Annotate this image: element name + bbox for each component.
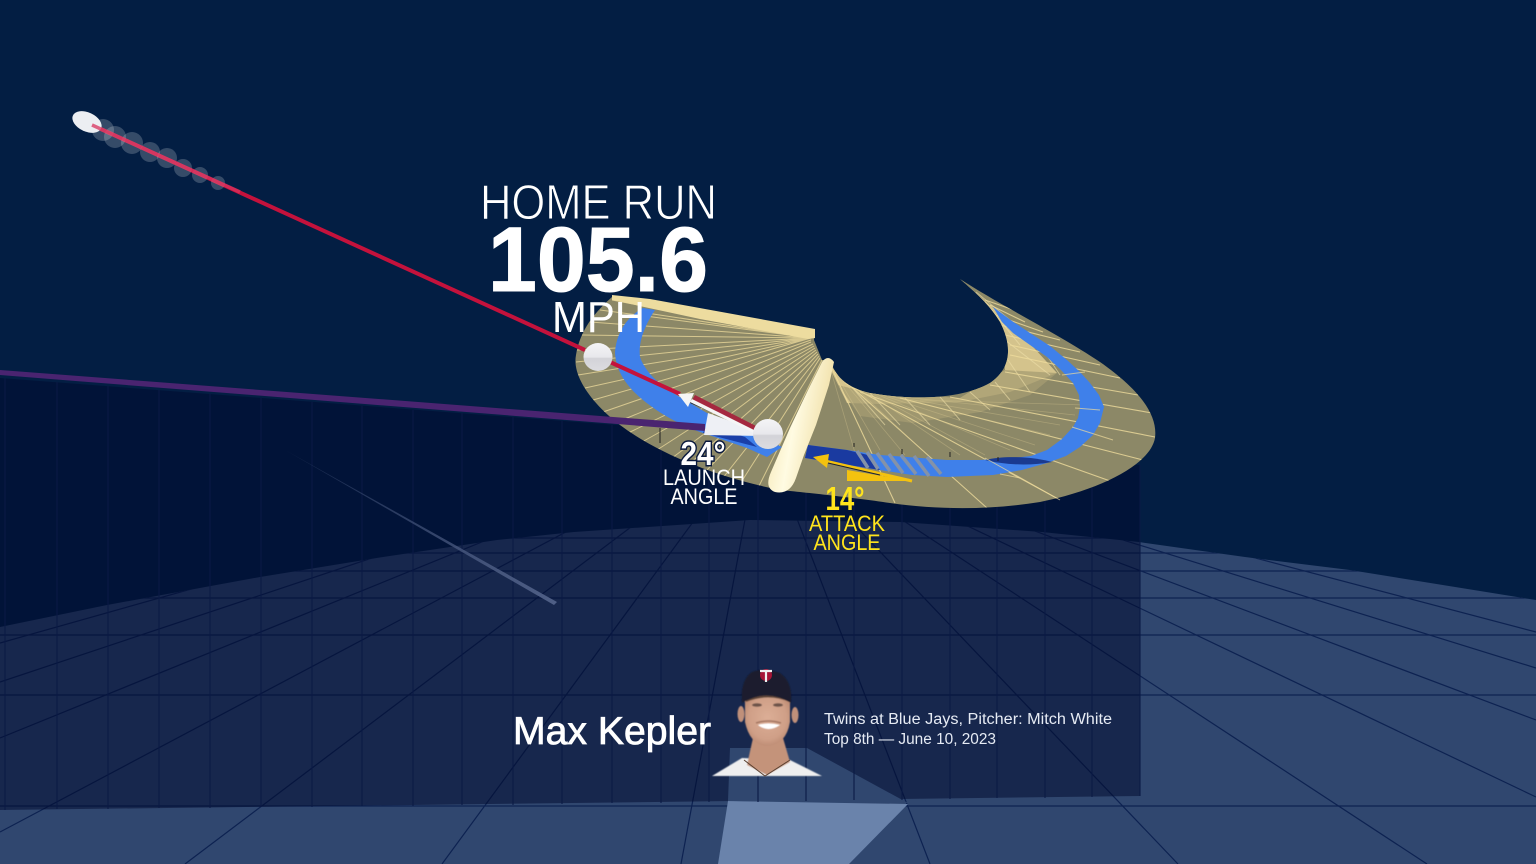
band shadow (985, 457, 1052, 464)
launch angle label: 24° (680, 435, 726, 472)
batted ball exit line: red (92, 125, 680, 394)
right lobe guide lines (829, 300, 1155, 508)
ball in flight (584, 343, 612, 371)
exit velocity unit: MPH (552, 293, 645, 342)
swing surface inner dense band (576, 279, 1155, 508)
bat (768, 358, 834, 492)
exit velocity value: 105.6 (488, 209, 708, 311)
player headshot (712, 669, 822, 776)
attack angle label: ANGLE (814, 530, 880, 555)
ball trail (69, 107, 240, 192)
rear bat position (612, 295, 815, 339)
backdrop wall panel (0, 378, 1140, 810)
launch angle label (663, 435, 745, 509)
attack angle label: 14° (826, 480, 864, 517)
sensor ticks (660, 428, 998, 461)
left lobe guide lines (576, 300, 822, 488)
game details: Twins at Blue Jays, Pitcher: Mitch White (824, 711, 1112, 728)
dark blue band near bat (805, 445, 880, 470)
guide line overlays on band (985, 372, 1113, 500)
launch angle label: LAUNCH (663, 465, 745, 490)
title: home run: HOME RUN (480, 176, 717, 230)
pitch path: purple line (0, 370, 705, 431)
player name: Max Kepler (513, 710, 711, 753)
batter's box highlight (718, 801, 908, 864)
game details: Top 8th — June 10, 2023 (824, 731, 996, 748)
attack angle arrow (813, 454, 912, 481)
band stripes (857, 451, 941, 476)
attack angle label: ATTACK (809, 511, 885, 536)
blue sweet-spot band right (805, 307, 1104, 477)
ball at contact (753, 419, 783, 449)
field ground with grid (0, 520, 1536, 864)
pitch trajectory shadow line (285, 450, 557, 605)
launch angle wedge (704, 413, 763, 436)
launch angle label: ANGLE (670, 484, 738, 509)
blue sweet-spot band left (615, 308, 782, 457)
launch arrow (678, 393, 762, 436)
swing path surface (575, 279, 1155, 508)
dark blue band under launch wedge (703, 424, 757, 447)
game details (824, 711, 1112, 748)
attack angle label (809, 480, 885, 555)
